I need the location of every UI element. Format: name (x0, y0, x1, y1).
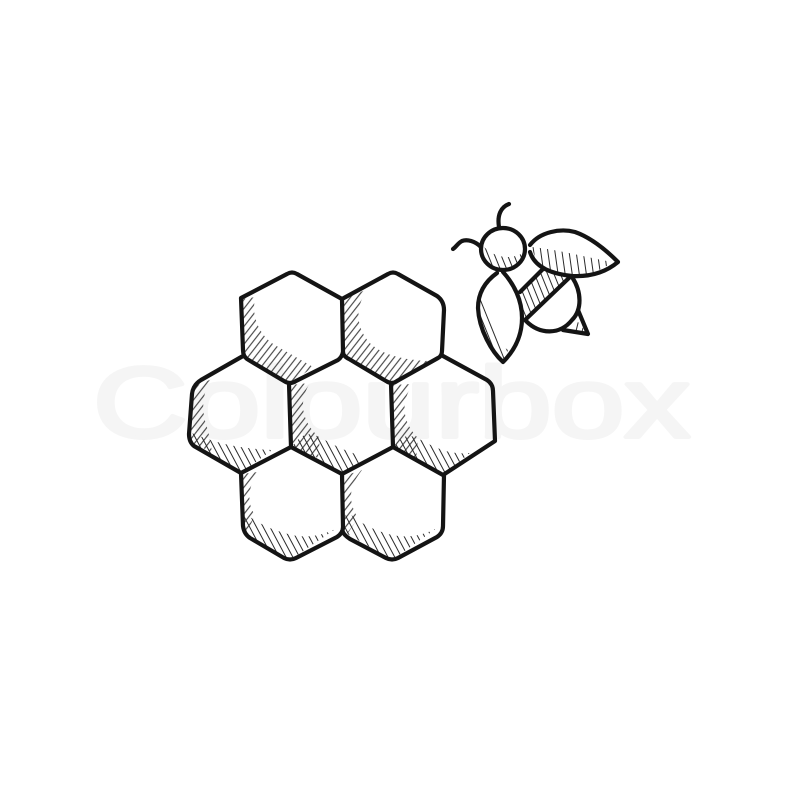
cell: top left (241, 272, 343, 383)
hatching: middle left cell, upper (189, 379, 212, 452)
cell: top right (342, 272, 444, 383)
bee antenna upper (498, 204, 509, 227)
bee right wing (530, 231, 618, 276)
bee stripe lines (520, 269, 570, 320)
hatching: bee stinger (570, 322, 588, 334)
watermark: Colourbox (93, 347, 690, 459)
hatching: bottom right cell, lower (344, 510, 437, 560)
hatching: top right cell (343, 289, 428, 384)
hatching: middle centre cell, upper (290, 383, 320, 458)
hatching: bee stripe (520, 269, 570, 320)
bee head (481, 228, 525, 270)
hatching: left wing (478, 298, 508, 362)
hatching: bottom right cell (344, 470, 362, 533)
bee stinger (563, 310, 588, 334)
hatching: top left cell (242, 297, 313, 384)
hatching: right wing (532, 247, 612, 276)
hatching: bottom left cell (242, 472, 258, 533)
cell: middle right (393, 356, 495, 475)
bee antenna left (453, 240, 481, 249)
hatching: middle centre cell, lower (291, 434, 362, 474)
cell: middle left (189, 356, 291, 473)
hatching: middle left cell, lower (189, 432, 272, 473)
hatching: bee head (484, 247, 523, 270)
hatching: middle right cell, upper (392, 384, 418, 460)
honeycomb (189, 272, 495, 560)
hatching: middle right cell, lower (393, 436, 470, 475)
cell: bottom right (343, 475, 444, 560)
cell: bottom left (241, 473, 343, 560)
bee body (526, 277, 580, 331)
bee (453, 204, 618, 362)
hatching: bottom left cell, lower (243, 514, 337, 560)
bee left wing (478, 272, 522, 362)
cell: middle centre (291, 384, 393, 474)
